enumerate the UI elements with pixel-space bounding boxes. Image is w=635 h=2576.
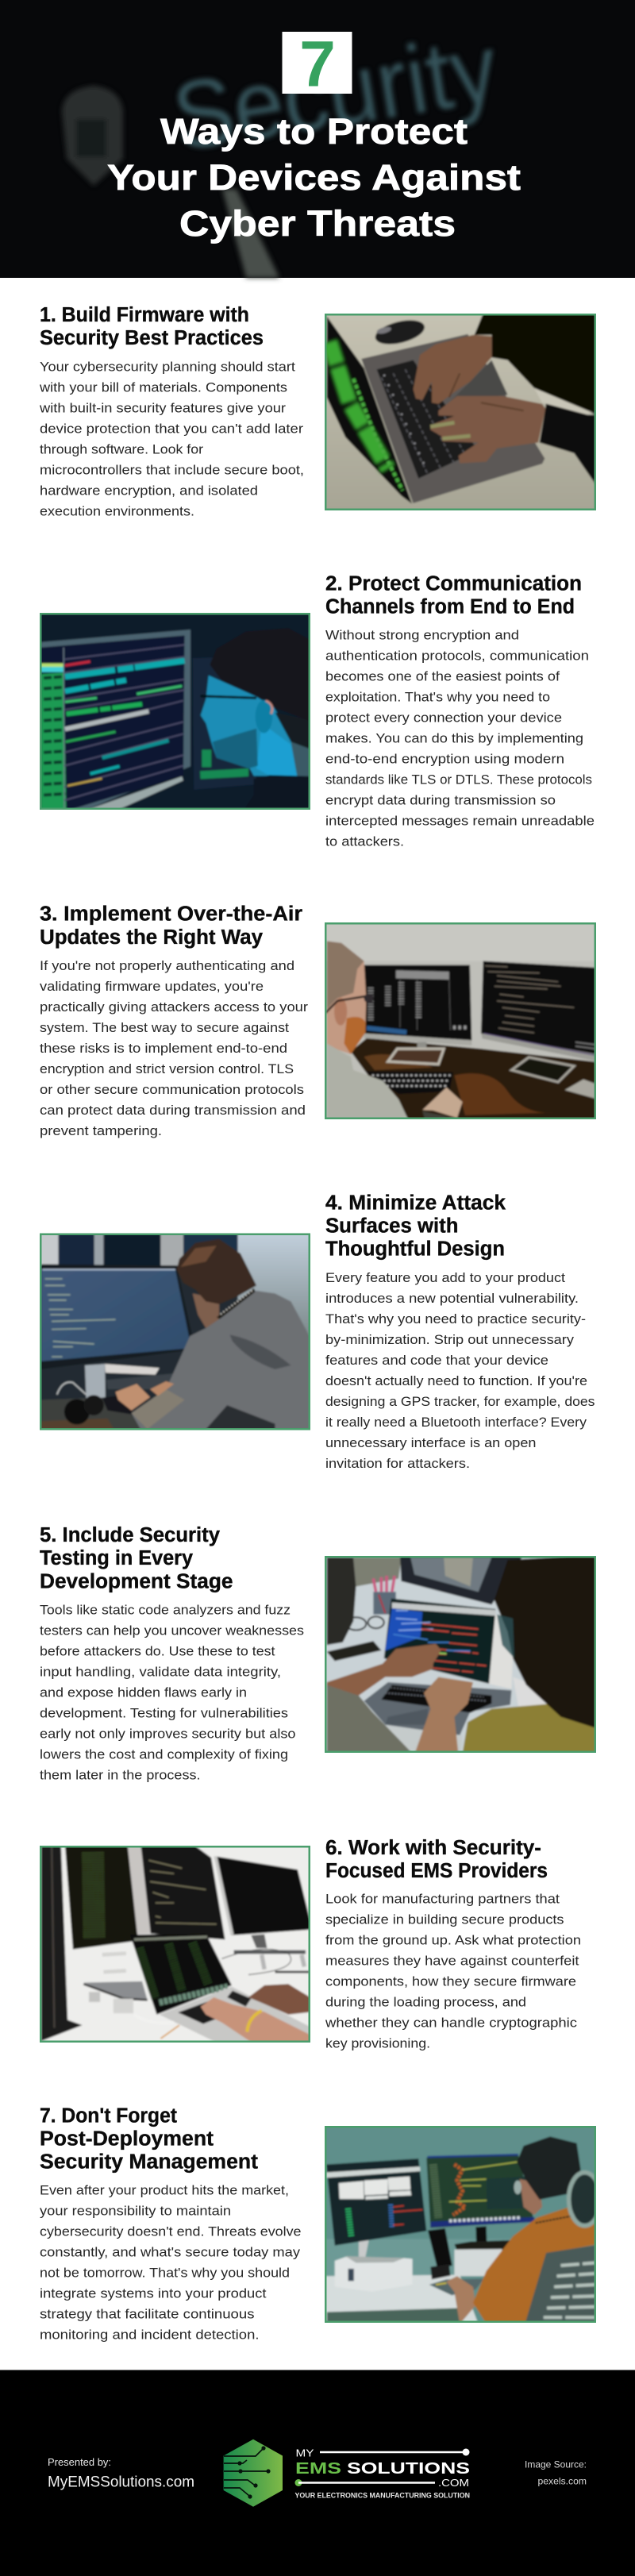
body text 5: before attackers do. Use these to test [40,1645,275,1659]
body text 7: not be tomorrow. That's why you should [40,2266,290,2281]
panel: section 2 [36,573,595,849]
body text 2: encrypt data during transmission so [325,794,556,808]
body text 5 [40,1604,304,1783]
heading 4: Surfaces with [325,1215,459,1237]
body text 2: end-to-end encryption using modern [325,753,564,767]
body text 5: them later in the process. [40,1769,200,1783]
hero background photo [0,0,635,278]
photo: developer with two monitors at wooden desk [321,918,603,1126]
heading 3: 3. Implement Over-the-Air [40,903,302,926]
body text 3 [40,959,309,1138]
body text 6: during the loading process, and [325,1996,526,2010]
body text 3: practically giving attackers access to your [40,1000,309,1015]
body text 4: unnecessary interface is an open [325,1436,537,1450]
body text 2: to attackers. [325,835,404,849]
body text 5: Tools like static code analyzers and fuzz [40,1604,291,1618]
body text 2: authentication protocols, communication [325,649,589,664]
panel: section 1 [39,304,603,519]
panel: section 4 [36,1192,595,1471]
body text 2: makes. You can do this by implementing [325,732,583,746]
body text 5: testers can help you uncover weaknesses [40,1624,304,1638]
heading 2: Channels from End to End [325,595,575,618]
body text 1 [39,360,304,519]
heading 2: 2. Protect Communication [325,573,582,595]
body text 3: prevent tampering. [40,1124,162,1138]
body text 4: by-minimization. Strip out unnecessary [325,1333,575,1347]
body text 4: designing a GPS tracker, for example, does [325,1395,595,1409]
body text 2 [325,629,595,849]
heading 7: Security Management [40,2151,259,2174]
title [107,111,521,244]
title: Cyber Threats [179,203,456,244]
photo: hands typing on laptop with green code [321,310,603,517]
body text 7: monitoring and incident detection. [40,2328,259,2343]
panel: hero header [0,0,635,278]
photo: monitors and laptop on white desk [36,1842,318,2049]
body text 2: intercepted messages remain unreadable [325,814,595,829]
body text 2: becomes one of the easiest points of [325,670,560,684]
number badge: 7 [299,29,336,100]
heading 4 [325,1192,506,1261]
body text 1: through software. Look for [40,443,204,457]
body text 6: Look for manufacturing partners that [325,1893,560,1907]
body text 6: whether they can handle cryptographic [325,2016,577,2031]
heading 5: Development Stage [40,1570,233,1592]
presented by: MyEMSSolutions.com [48,2474,194,2491]
title: Your Devices Against [107,157,521,198]
heading 7: 7. Don't Forget [40,2105,177,2127]
body text 4: introduces a new potential vulnerability. [325,1292,579,1306]
body text 3: encryption and strict version control. TLS [40,1062,294,1076]
body text 6: specialize in building secure products [325,1913,564,1927]
heading 2 [325,573,582,618]
heading 7 [40,2105,259,2174]
body text 7: Even after your product hits the market, [40,2184,289,2198]
body text 3: these risks is to implement end-to-end [40,1042,287,1056]
body text 3: or other secure communication protocols [40,1083,304,1097]
body text 6: key provisioning. [325,2037,430,2051]
body text 4: doesn't actually need to function. If you're [325,1374,587,1388]
body text 4: invitation for attackers. [325,1457,470,1471]
body text 3: If you're not properly authenticating and [40,959,294,973]
body text 2: Without strong encryption and [325,629,519,643]
logo: MY EMS Solutions: .COM [438,2477,469,2489]
body text 4 [325,1271,595,1471]
body text 7: constantly, and what's secure today may [40,2246,301,2260]
image source [525,2459,587,2486]
heading 4: Thoughtful Design [325,1238,505,1261]
body text 1: execution environments. [40,505,194,519]
photo: developer in orange shirt at two monitors [321,2122,603,2329]
image source: pexels.com [538,2475,587,2486]
body text 5: early not only improves security but also [40,1727,295,1742]
body text 1: microcontrollers that include secure boot, [40,464,304,478]
logo: MY EMS Solutions: MY [295,2447,314,2459]
body text 4: Every feature you add to your product [325,1271,565,1285]
body text 1: with your bill of materials. Components [39,381,287,395]
body text 2: standards like TLS or DTLS. These protocols [325,773,592,787]
heading 6 [325,1837,548,1882]
heading 5: Testing in Every [40,1547,194,1569]
heading 7: Post-Deployment [40,2128,214,2151]
body text 7 [40,2184,302,2343]
heading 4: 4. Minimize Attack [325,1192,506,1215]
heading 3 [40,903,302,949]
body text 2: protect every connection your device [325,711,562,726]
image source: Image Source: [525,2459,587,2470]
heading 3: Updates the Right Way [40,926,264,949]
heading 1 [40,304,264,349]
body text 1: Your cybersecurity planning should start [40,360,295,375]
body text 6: components, how they secure firmware [325,1975,576,1989]
body text 3: can protect data during transmission and [40,1103,306,1118]
body text 6: measures they have against counterfeit [325,1954,579,1969]
heading 1: Security Best Practices [40,327,264,349]
panel: section 6 [36,1837,581,2051]
heading 6: 6. Work with Security- [325,1837,541,1859]
body text 4: That's why you need to practice security- [325,1312,586,1327]
body text 6 [325,1893,581,2051]
body text 3: validating firmware updates, you're [40,980,264,994]
body text 4: features and code that your device [325,1353,548,1368]
presented by: Presented by: [48,2456,111,2468]
body text 7: strategy that facilitate continuous [40,2308,254,2322]
body text 1: hardware encryption, and isolated [40,484,258,499]
body text 7: cybersecurity doesn't end. Threats evolve [40,2225,302,2239]
panel: footer [0,2370,635,2576]
panel: section 5 [40,1524,603,1783]
icon: circuit hexagon [224,2439,283,2507]
logo: MY EMS Solutions: YOUR ELECTRONICS MANUFACTURING SOLUTION [295,2491,470,2500]
body text 7: your responsibility to maintain [40,2204,231,2219]
heading 6: Focused EMS Providers [325,1860,548,1882]
number badge [283,29,352,100]
body text 5: development. Testing for vulnerabilities [40,1707,288,1721]
body text 1: with built-in security features give your [39,402,287,416]
hero background photo: Security [166,13,504,171]
heading 5 [40,1524,233,1592]
body text 3: system. The best way to secure against [40,1021,289,1035]
heading 5: 5. Include Security [40,1524,221,1546]
logo: MY EMS Solutions: SOLUTIONS [347,2460,470,2478]
body text 5: input handling, validate data integrity, [40,1665,281,1680]
body text 5: and expose hidden flaws early in [40,1686,247,1700]
body text 5: lowers the cost and complexity of fixing [40,1748,288,1762]
photo: hacker in cap facing terminal [36,609,318,816]
title: Ways to Protect [160,111,468,152]
body text 2: exploitation. That's why you need to [325,691,550,705]
panel: section 7 [40,2105,603,2343]
body text 4: it really need a Bluetooth interface? Every [325,1415,587,1430]
logo: MY EMS Solutions: EMS [295,2460,341,2478]
logo: MY EMS Solutions [224,2439,470,2507]
body text 6: from the ground up. Ask what protection [325,1934,581,1948]
presented by [48,2456,194,2491]
body text 1: device protection that you can't add later [40,422,304,437]
body text 7: integrate systems into your product [40,2287,267,2301]
photo: two colleagues reviewing code on laptop [321,1552,603,1759]
heading 1: 1. Build Firmware with [40,304,249,326]
panel: section 3 [40,903,603,1138]
photo: programmer in grey hoodie at blue monitor [36,1230,318,1437]
